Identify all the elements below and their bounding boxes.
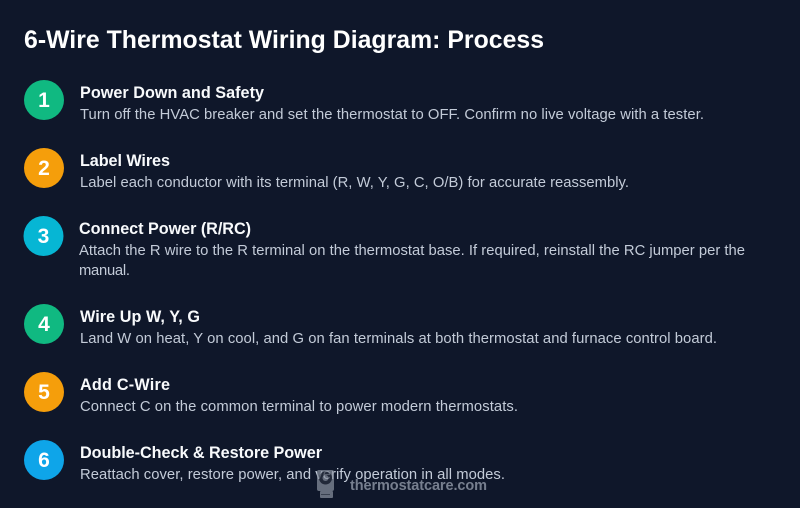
step 4 heading: Wire Up W, Y, G (80, 308, 200, 326)
step 2 (24, 148, 629, 191)
step 6 heading: Double-Check & Restore Power (80, 444, 323, 462)
title: 6-Wire Thermostat Wiring Diagram: Process (24, 27, 544, 54)
step 5 (24, 372, 518, 415)
step 5 badge (24, 372, 64, 412)
step 1 badge: 1 (38, 89, 50, 112)
step 2 badge: 2 (38, 157, 50, 180)
step 3 heading: Connect Power (R/RC) (79, 220, 251, 238)
step 2 description: Label each conductor with its terminal (R, W, Y, G, C, O/B) for accurate reassembly. (80, 175, 629, 191)
step 4 description: Land W on heat, Y on cool, and G on fan terminals at both thermostat and furnace control board. (80, 331, 717, 347)
step 4 badge (24, 304, 64, 344)
watermark text: thermostatcare.com (350, 478, 487, 494)
step 1 badge (24, 80, 64, 120)
step 2 badge (24, 148, 64, 188)
step 4 (24, 304, 717, 347)
watermark (317, 470, 487, 498)
step 3 description: manual. (79, 263, 130, 279)
step 4 badge: 4 (38, 313, 50, 336)
step 1 heading: Power Down and Safety (80, 84, 264, 102)
step 6 badge (24, 440, 64, 480)
step 3 badge: 3 (38, 225, 49, 248)
step 3 description: Attach the R wire to the R terminal on the thermostat base. If required, reinstall the RC jumper per the (79, 243, 745, 259)
step 3 badge (24, 216, 64, 256)
step 3 description (79, 243, 745, 279)
step 5 heading: Add C-Wire (80, 376, 170, 394)
icon: thermostat (317, 470, 334, 498)
step 6 description: Reattach cover, restore power, and verify operation in all modes. (80, 467, 505, 483)
step 1 (24, 80, 704, 123)
step 3 (24, 216, 745, 279)
step 6 badge: 6 (38, 449, 50, 472)
step 6 (24, 440, 505, 483)
step 2 heading: Label Wires (80, 152, 170, 170)
step 1 description: Turn off the HVAC breaker and set the thermostat to OFF. Confirm no live voltage with a tester. (80, 107, 704, 123)
step 5 badge: 5 (38, 381, 50, 404)
step 5 description: Connect C on the common terminal to power modern thermostats. (80, 399, 518, 415)
